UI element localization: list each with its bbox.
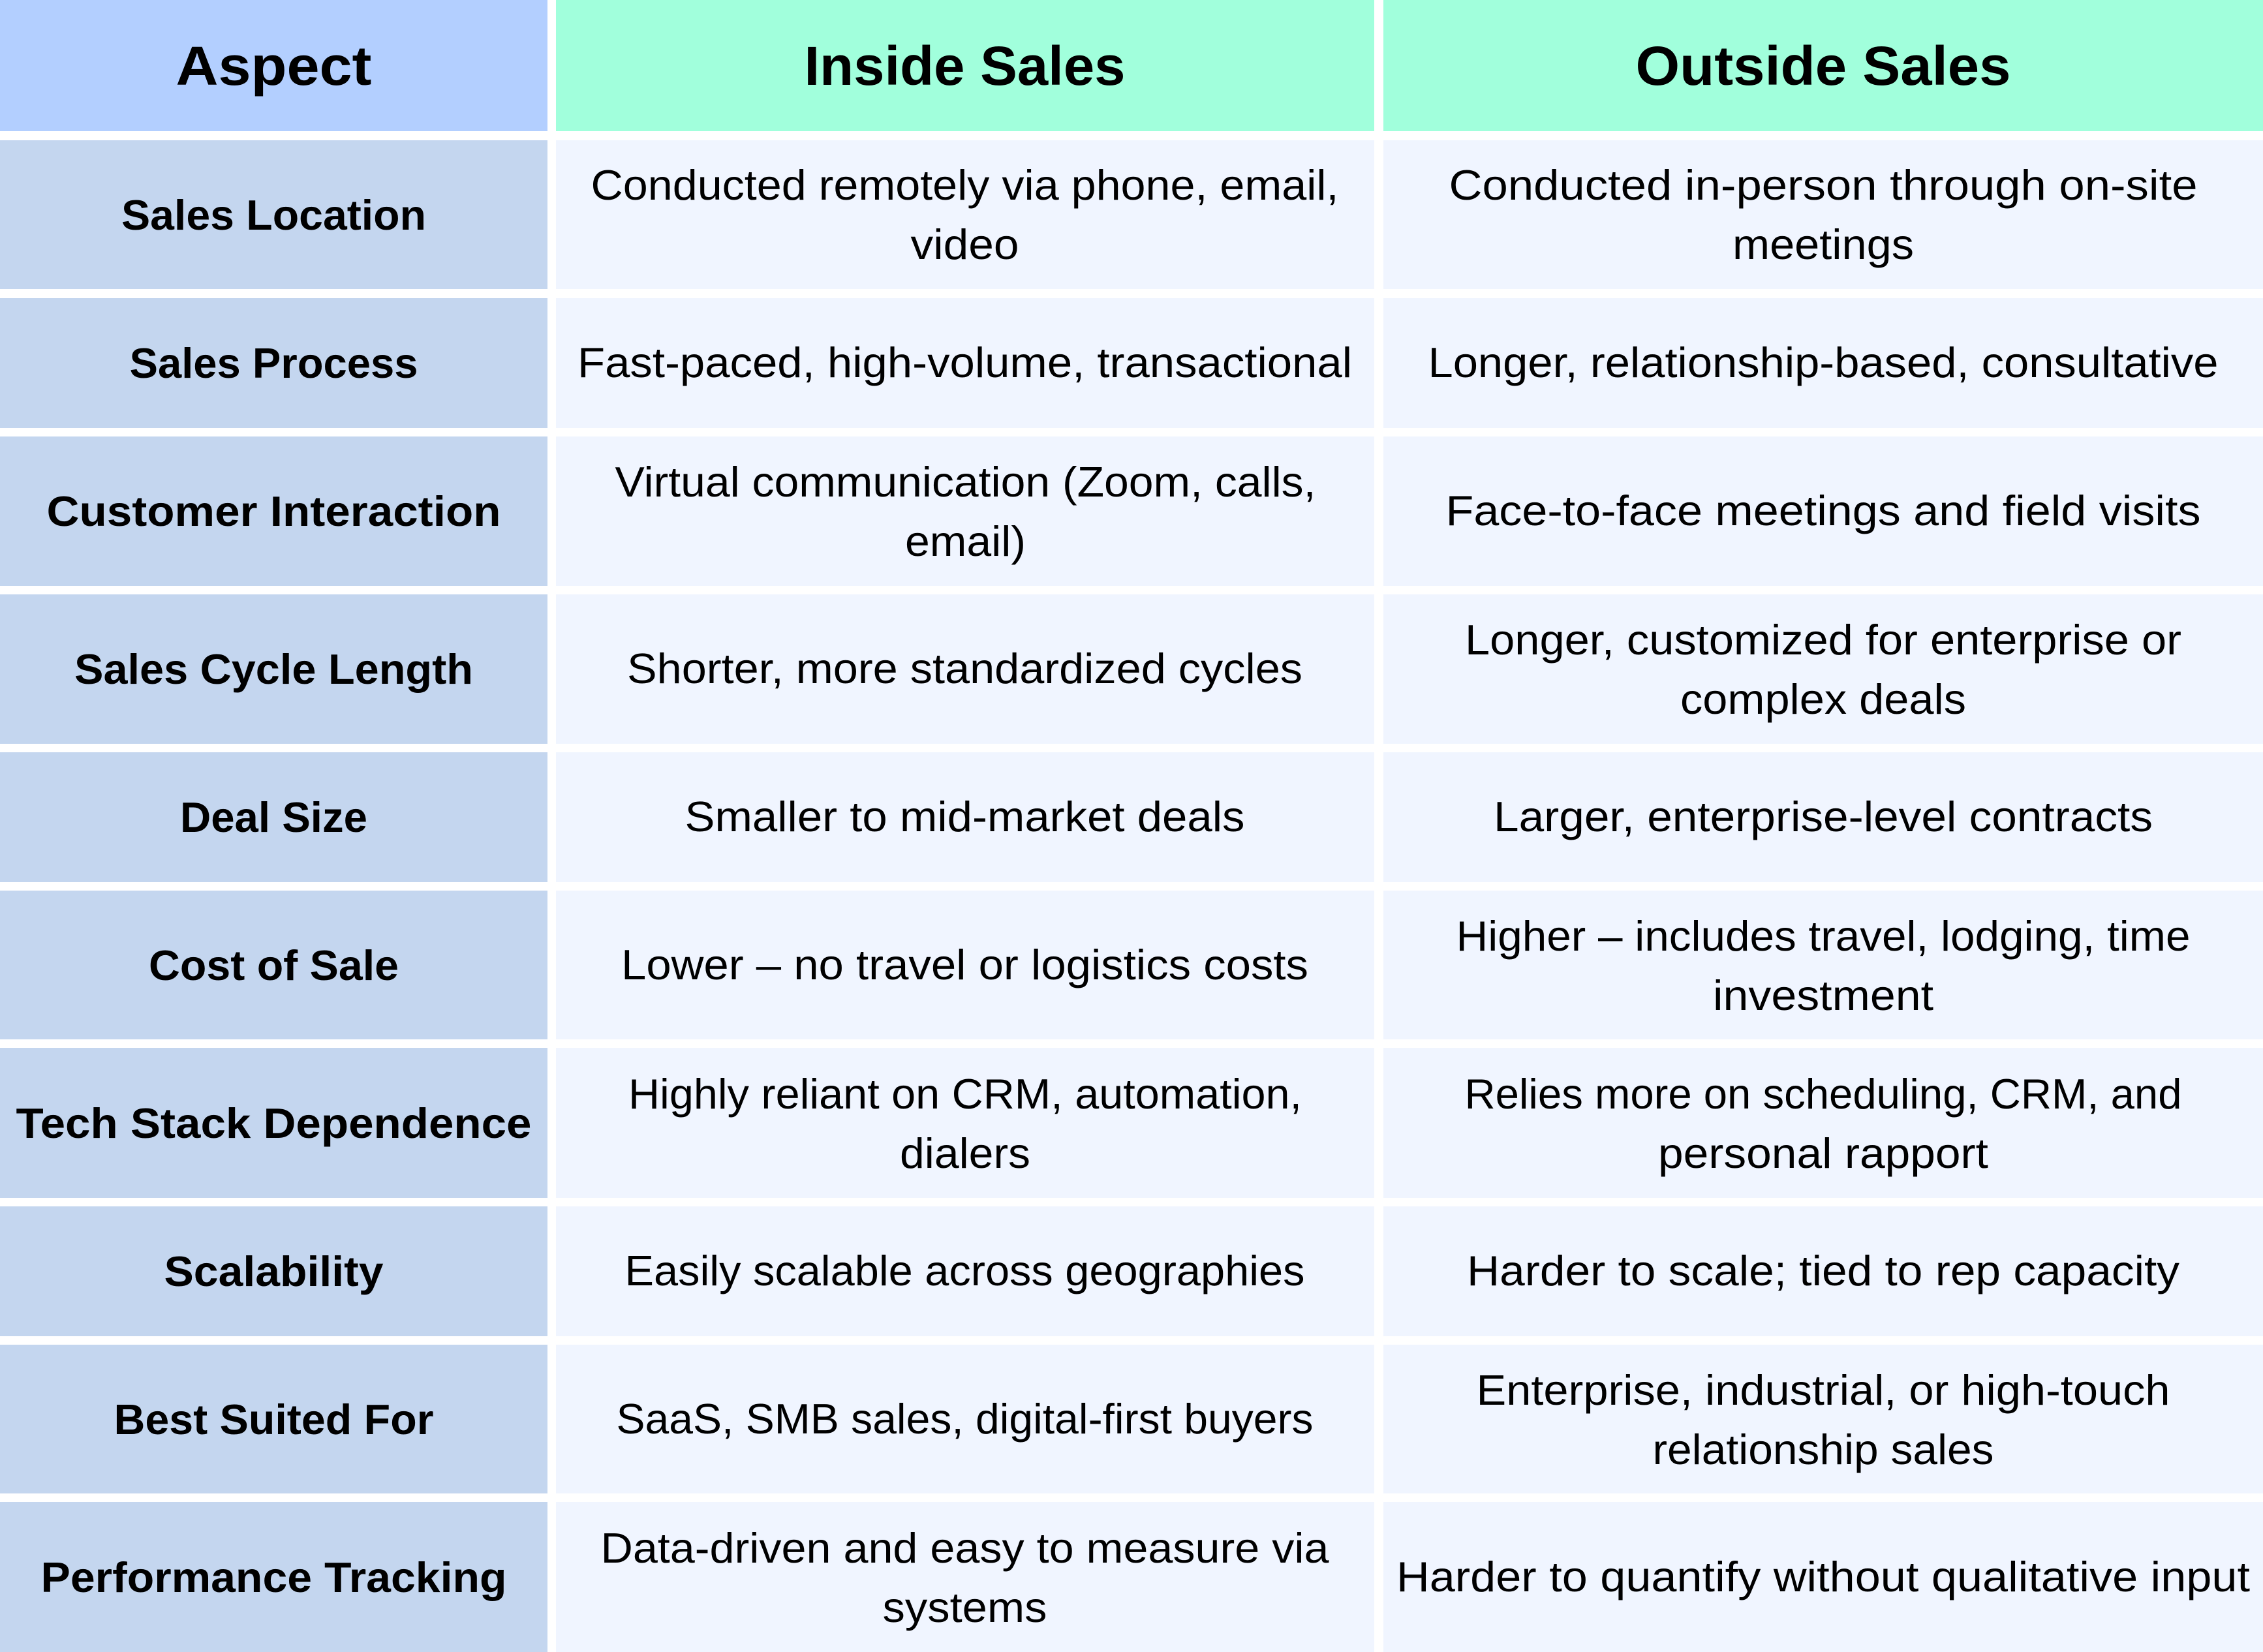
inside sales cell: Fast-paced, high-volume, transactional [577,339,1352,386]
aspect cell: Sales Location [121,191,426,239]
outside sales cell: Relies more on scheduling, CRM, and [1464,1070,2182,1118]
heading: Inside Sales: Inside Sales [804,35,1125,97]
heading: Aspect [0,0,547,131]
inside sales cell: SaaS, SMB sales, digital-first buyers [616,1395,1313,1443]
row: Best Suited For [0,1345,2263,1493]
outside sales cell: Harder to quantify without qualitative input [1396,1553,2250,1600]
outside sales cell: personal rapport [1658,1129,1988,1177]
row: Sales Process [0,298,2263,428]
row: Tech Stack Dependence [0,1048,2263,1198]
inside sales cell [556,436,1374,586]
inside sales cell [556,298,1374,428]
outside sales cell: meetings [1732,221,1914,268]
aspect cell: Performance Tracking [40,1553,506,1601]
inside sales cell: video [911,221,1019,268]
outside sales cell: relationship sales [1652,1426,1994,1473]
outside sales cell: Longer, customized for enterprise or [1465,616,2181,664]
inside sales cell [556,1206,1374,1336]
outside sales cell [1383,1048,2263,1198]
row: Performance Tracking [0,1502,2263,1652]
outside sales cell: Longer, relationship-based, consultative [1428,339,2219,386]
outside sales cell [1383,1345,2263,1493]
aspect cell: Best Suited For [114,1396,433,1443]
inside sales cell [556,891,1374,1039]
outside sales cell: complex deals [1680,675,1966,723]
outside sales cell [1383,140,2263,289]
aspect cell [0,1345,547,1493]
inside sales cell: Conducted remotely via phone, email, [591,161,1339,209]
outside sales cell [1383,1502,2263,1652]
aspect cell: Tech Stack Dependence [16,1099,531,1147]
heading: Aspect: Aspect [176,35,372,97]
outside sales cell [1383,891,2263,1039]
inside sales cell [556,140,1374,289]
aspect cell [0,1502,547,1652]
header row [0,0,2263,131]
inside sales cell: Smaller to mid-market deals [685,793,1245,840]
aspect cell [0,752,547,882]
aspect cell [0,298,547,428]
aspect cell: Sales Cycle Length [74,645,473,693]
aspect cell: Customer Interaction [47,487,501,535]
inside sales cell: dialers [900,1129,1030,1177]
inside sales cell: Highly reliant on CRM, automation, [628,1070,1302,1118]
outside sales cell: investment [1713,971,1933,1019]
aspect cell [0,891,547,1039]
aspect cell [0,594,547,744]
row: Sales Location [0,140,2263,289]
inside sales cell: Shorter, more standardized cycles [627,645,1302,692]
outside sales cell [1383,436,2263,586]
outside sales cell: Harder to scale; tied to rep capacity [1467,1247,2180,1294]
outside sales cell: Conducted in-person through on-site [1449,161,2198,209]
outside sales cell: Larger, enterprise-level contracts [1494,793,2153,840]
outside sales cell: Enterprise, industrial, or high-touch [1476,1366,2170,1414]
inside sales cell [556,752,1374,882]
inside sales cell: systems [882,1583,1047,1631]
inside sales cell [556,1345,1374,1493]
aspect cell [0,140,547,289]
outside sales cell [1383,298,2263,428]
aspect cell [0,1048,547,1198]
aspect cell [0,1206,547,1336]
inside sales cell [556,1048,1374,1198]
inside sales cell [556,1502,1374,1652]
inside sales cell: email) [905,517,1026,565]
inside sales cell: Virtual communication (Zoom, calls, [615,458,1316,506]
aspect cell: Cost of Sale [149,941,399,989]
heading: Outside Sales: Outside Sales [1635,35,2011,97]
row: Cost of Sale [0,891,2263,1039]
inside sales cell: Lower – no travel or logistics costs [621,941,1308,988]
heading: Outside Sales [1383,0,2263,131]
row: Sales Cycle Length [0,594,2263,744]
inside sales cell [556,594,1374,744]
inside sales cell: Data-driven and easy to measure via [600,1524,1329,1572]
inside sales cell: Easily scalable across geographies [625,1247,1305,1294]
aspect cell: Sales Process [129,339,418,387]
outside sales cell [1383,594,2263,744]
outside sales cell [1383,752,2263,882]
outside sales cell: Higher – includes travel, lodging, time [1456,912,2190,960]
row: Deal Size [0,752,2263,882]
row: Customer Interaction [0,436,2263,586]
aspect cell: Deal Size [180,793,367,841]
heading: Inside Sales [556,0,1374,131]
outside sales cell: Face-to-face meetings and field visits [1446,487,2200,534]
aspect cell [0,436,547,586]
row: Scalability [0,1206,2263,1336]
aspect cell: Scalability [164,1247,384,1295]
outside sales cell [1383,1206,2263,1336]
